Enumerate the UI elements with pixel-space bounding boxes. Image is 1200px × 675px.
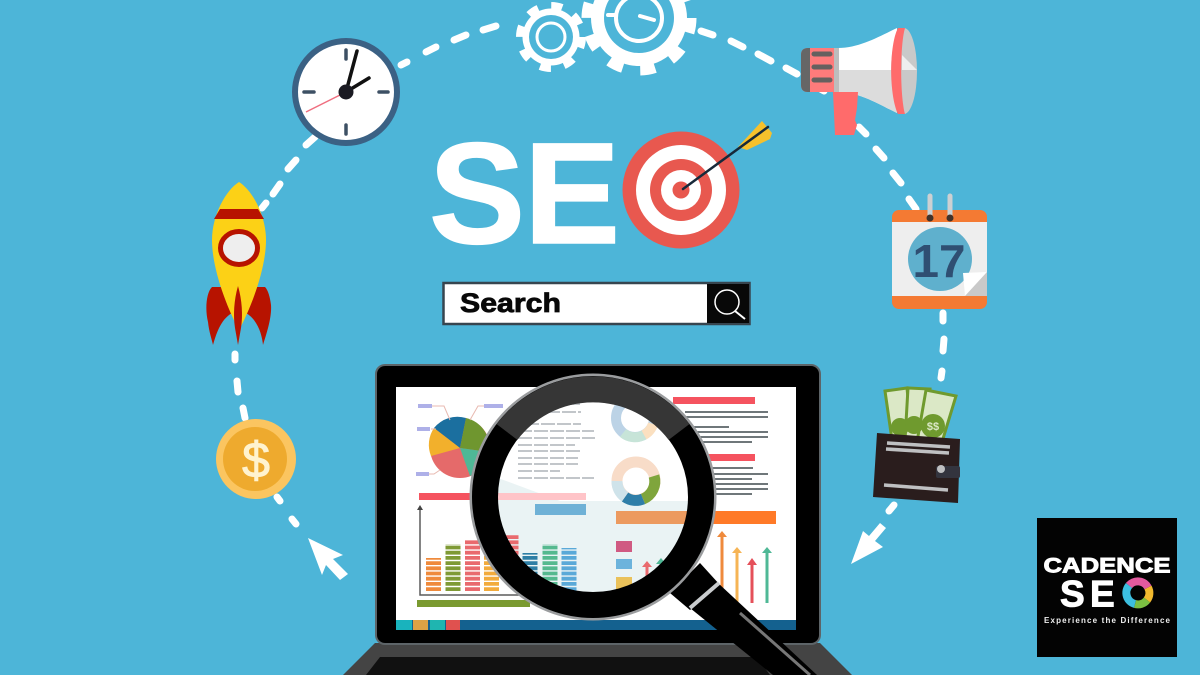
icon: calendar: 17 bbox=[912, 235, 966, 287]
icon: search magnifier bbox=[715, 290, 745, 319]
keyboard bbox=[366, 657, 770, 675]
laptop lid bbox=[376, 365, 820, 644]
legend squares bbox=[616, 541, 632, 590]
search bar bbox=[444, 283, 750, 324]
bar chart bbox=[417, 505, 520, 595]
title: SE letters: E bbox=[524, 113, 620, 274]
logo S letter: S bbox=[1060, 574, 1085, 614]
lens text lines bbox=[518, 404, 595, 478]
search label: Search bbox=[460, 288, 561, 318]
lens rim bbox=[471, 375, 715, 619]
lens ring highlight bbox=[507, 389, 679, 432]
icon: arrowhead right bbox=[851, 523, 886, 564]
laptop screen bbox=[396, 387, 796, 630]
logo tagline: Experience the Difference bbox=[1044, 616, 1171, 625]
lens contents bbox=[498, 403, 688, 592]
icon: wallet with cash bbox=[873, 388, 960, 503]
icon: dollar coin bbox=[216, 419, 296, 499]
handle bbox=[670, 563, 817, 675]
logo wordmark: CADENCE bbox=[1044, 554, 1170, 578]
lens small arrows bbox=[642, 558, 664, 576]
icon: bullseye target bbox=[622, 121, 772, 248]
icon: clock bbox=[295, 41, 397, 143]
magnifying glass bbox=[471, 375, 817, 675]
title: SE letters: S bbox=[429, 113, 525, 274]
icon: rocket bbox=[206, 182, 271, 345]
lens black ring bbox=[485, 389, 701, 605]
taskbar bbox=[396, 620, 796, 630]
pie chart bbox=[416, 406, 503, 478]
logo ring bbox=[1126, 581, 1149, 604]
icon: gears bbox=[520, 0, 691, 70]
laptop base bbox=[343, 643, 852, 675]
text lines right bbox=[672, 412, 768, 494]
logo E letter: E bbox=[1090, 574, 1115, 614]
lens donut top bbox=[616, 399, 654, 437]
logo: Cadence SEO bbox=[1037, 518, 1177, 657]
icon: megaphone bbox=[801, 28, 917, 135]
icon: wallet with cash: $$ bbox=[927, 421, 939, 433]
screen headline bars bbox=[417, 397, 776, 607]
lens bars bbox=[506, 535, 576, 591]
laptop bbox=[343, 365, 852, 675]
lens donut bottom bbox=[617, 462, 655, 500]
title: SE letters bbox=[429, 113, 620, 274]
icon: calendar bbox=[892, 196, 987, 309]
dashed circular path bbox=[235, 26, 944, 524]
icon: cursor arrow bbox=[308, 538, 348, 580]
icon: dollar coin: $ bbox=[242, 432, 270, 488]
arrow chart bbox=[717, 531, 772, 603]
